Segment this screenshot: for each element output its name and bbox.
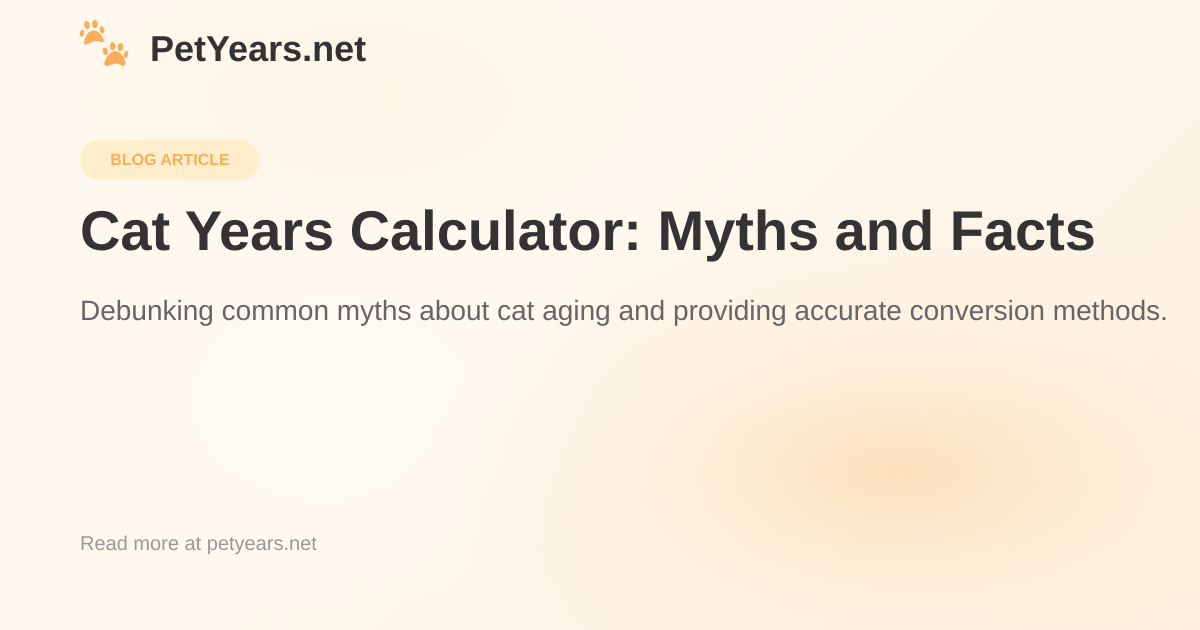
title: Cat Years Calculator: Myths and Facts	[80, 199, 1096, 262]
brand name: PetYears.net	[150, 28, 366, 69]
badge: blog article	[80, 140, 260, 180]
subtitle: Debunking common myths about cat aging and providing accurate conversion methods.	[80, 295, 1168, 326]
footer link text: Read more at petyears.net	[80, 533, 317, 555]
badge: blog article: BLOG ARTICLE	[110, 152, 230, 169]
icon: paw prints logo	[80, 20, 128, 66]
